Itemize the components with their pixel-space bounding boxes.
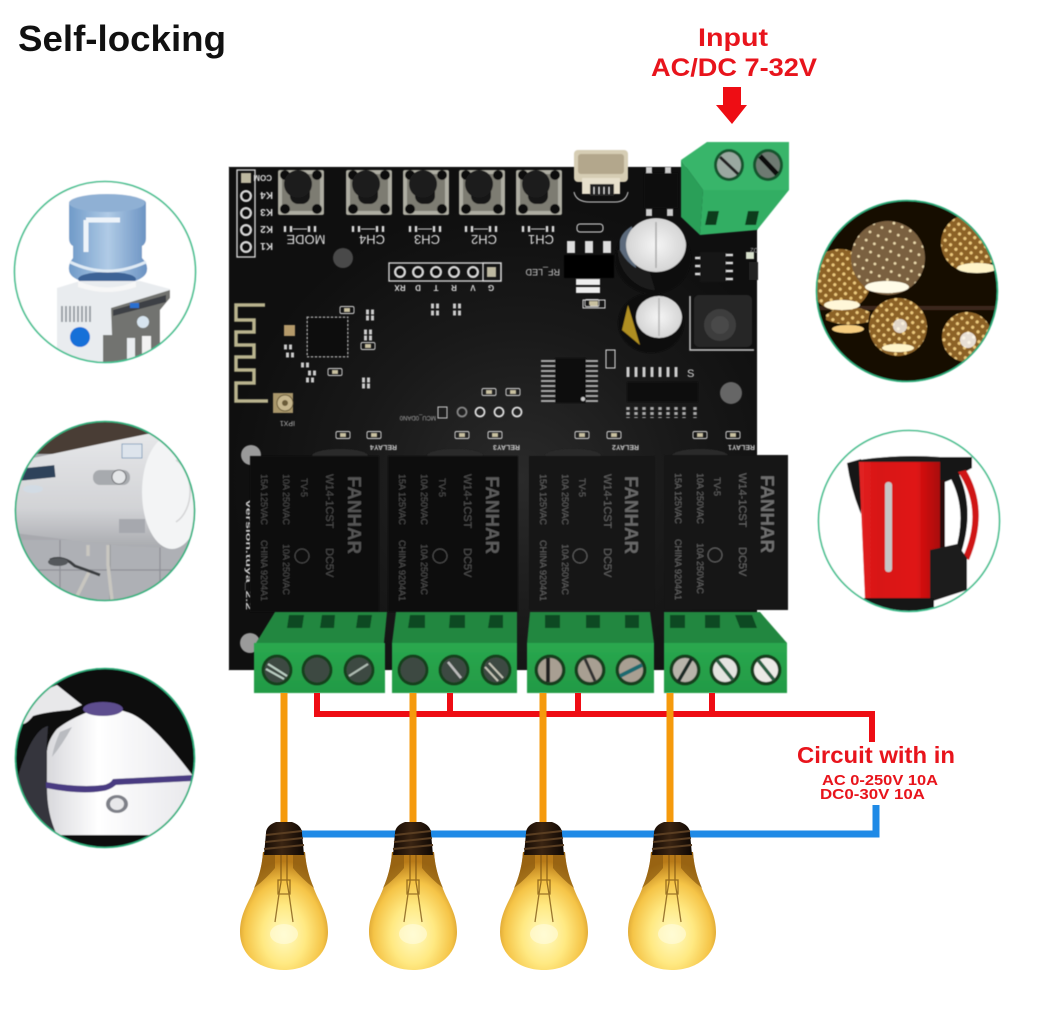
relay 2: W14-1CST: [601, 474, 613, 529]
photo: water heater: [14, 420, 202, 602]
relay 3: FANHAR: [482, 476, 502, 554]
inductor: [690, 295, 754, 350]
relay 3: TV-5: [437, 478, 447, 497]
electrolytic capacitor 1: [615, 218, 691, 294]
terminal block 4: [664, 612, 787, 693]
terminal block 2: [392, 612, 517, 693]
chip U1: D2: [750, 246, 758, 252]
WiFi antenna trace: [236, 305, 268, 401]
relay 3: 10A 250VAC: [419, 474, 429, 525]
button labels: MODE: [286, 232, 326, 247]
relay 1: 10A 250VAC: [695, 473, 705, 524]
wiring: blue neutral line: [300, 805, 876, 834]
input terminal block: [681, 142, 789, 235]
relay 4: 10A 250VAC: [281, 474, 291, 525]
header RX D T R V G: G: [488, 283, 494, 292]
input label: [651, 24, 817, 82]
voltage regulator: [564, 224, 614, 308]
circuit rating label: [797, 742, 955, 803]
relay silk labels: RELAY1: [728, 443, 755, 450]
circuit rating label: DC0-30V 10A: [820, 786, 925, 803]
pin header K1-K4: K3: [260, 206, 273, 217]
relay 1: [664, 455, 788, 610]
relay 2: FANHAR: [621, 476, 641, 554]
base: [930, 544, 967, 602]
relay 4: TV-5: [299, 478, 309, 497]
header RX D T R V G: T: [433, 283, 438, 292]
antenna connector: [273, 393, 295, 426]
relay 4: CHINA 9204A1: [259, 540, 269, 601]
input label: AC/DC 7-32V: [651, 54, 817, 82]
bulb 4: [628, 822, 716, 970]
microcontroller SOP: [541, 350, 615, 403]
board substrate: [229, 167, 757, 670]
pipes and shower: [75, 545, 112, 600]
relay silk labels: [370, 443, 755, 450]
photo: humidifier: [14, 668, 195, 848]
micro USB connector: [574, 150, 628, 202]
relay 2: 10A 250VAC: [560, 474, 570, 525]
relay 1: CHINA 9204A1: [673, 539, 683, 600]
relay 3: 10A 250VAC: [419, 544, 429, 595]
wiring: red common line: [317, 693, 872, 742]
header RX D T R V G: D: [415, 283, 421, 292]
relay 1: 10A 250VAC: [695, 543, 705, 594]
relay 3: CHINA 9204A1: [397, 540, 407, 601]
relay 2: [529, 456, 655, 610]
bulb 1: [240, 822, 328, 970]
title: Self-locking: [18, 18, 226, 59]
header RX D T R V G: RX: [394, 283, 406, 292]
pin header K1-K4: K1: [260, 240, 273, 251]
relay 1: TV-5: [712, 477, 722, 496]
relay 1: DC5V: [736, 547, 748, 577]
handle: [939, 456, 973, 482]
body: [859, 462, 940, 600]
relay 4: FANHAR: [344, 476, 364, 554]
pin header K1-K4: COM: [253, 173, 272, 182]
photo: pendant lamps: [809, 200, 1000, 382]
relay silk labels: RELAY4: [370, 443, 397, 450]
bottle: [69, 196, 147, 285]
photo: water dispenser: [14, 181, 196, 363]
pin header K1-K4: K4: [260, 189, 273, 200]
button labels: CH3: [414, 232, 440, 247]
mounting holes: [240, 248, 742, 653]
relay 4: 15A 125VAC: [259, 474, 269, 525]
button labels: CH2: [471, 232, 497, 247]
pads and LEDs row: MCU_0DAN0: [399, 414, 436, 420]
relay 3: [388, 456, 518, 612]
circuit rating label: Circuit with in: [797, 742, 955, 768]
bulb 3: [500, 822, 588, 970]
spout: [847, 459, 861, 514]
button labels: CH4: [359, 232, 385, 247]
relay 4: 10A 250VAC: [281, 544, 291, 595]
terminal block 1: [254, 612, 387, 693]
relay 2: TV-5: [577, 478, 587, 497]
relay silk labels: RELAY3: [493, 443, 520, 450]
RF_LED silk label: RF_LED: [525, 267, 560, 277]
WiFi module QFN: [284, 300, 599, 388]
relay 3: 15A 125VAC: [397, 474, 407, 525]
tactile buttons: [278, 170, 562, 232]
button labels: [286, 232, 554, 247]
relay silk labels: RELAY2: [612, 443, 639, 450]
relay 4: W14-1CST: [323, 474, 335, 529]
wiring: orange load lines: [284, 693, 670, 826]
power MOSFET: [644, 167, 678, 216]
arrow: power input: [716, 87, 747, 124]
pin header K1-K4: K2: [260, 223, 273, 234]
bulb 2: [369, 822, 457, 970]
photo: red kettle: [818, 430, 1000, 612]
header RX D T R V G: V: [470, 283, 476, 292]
header RX D T R V G: R: [451, 283, 457, 292]
relay humps: [312, 449, 728, 463]
electrolytic capacitor 2: [618, 293, 684, 353]
header RX D T R V G: [389, 263, 501, 292]
antenna connector: IPX1: [280, 419, 295, 426]
relay 1: 15A 125VAC: [673, 473, 683, 524]
chip U1: [695, 246, 758, 282]
relay 2: DC5V: [601, 548, 613, 578]
button labels: CH1: [528, 232, 554, 247]
version silk: version.tuya_2.2: [244, 500, 253, 611]
lid: [858, 456, 940, 463]
relay 4: DC5V: [323, 548, 335, 578]
relay 4: [250, 456, 379, 612]
relay 1: FANHAR: [757, 475, 777, 553]
input label: Input: [698, 24, 769, 52]
circuit rating label: AC 0-250V 10A: [822, 772, 938, 789]
pin header K1-K4: [237, 170, 273, 257]
relay 3: DC5V: [461, 548, 473, 578]
cabinet: [57, 281, 170, 362]
relay driver chip: S: [687, 368, 694, 380]
relay 1: W14-1CST: [736, 473, 748, 528]
relay 2: 15A 125VAC: [538, 474, 548, 525]
relay driver chip: [627, 367, 698, 418]
panel: circuit board: [229, 142, 789, 693]
pads and LEDs row: [336, 388, 740, 438]
terminal block 3: [527, 612, 654, 693]
relay 2: CHINA 9204A1: [538, 540, 548, 601]
relay 2: 10A 250VAC: [560, 544, 570, 595]
relay 3: W14-1CST: [461, 474, 473, 529]
